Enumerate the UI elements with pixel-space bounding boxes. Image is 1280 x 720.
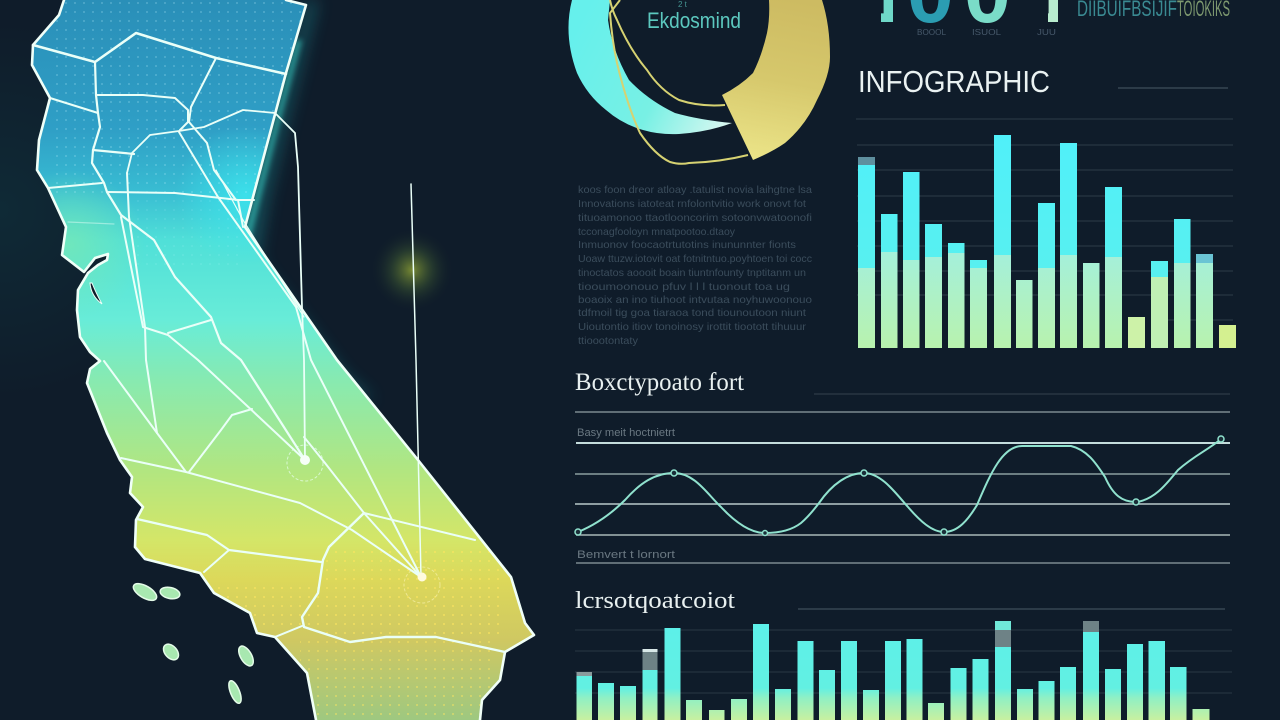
gold ring segment bbox=[722, 0, 830, 160]
line chart top label: Basy meit hoctnietrt bbox=[577, 427, 675, 439]
heading: line chart: Boxctypoato fort bbox=[575, 369, 744, 396]
text block: tiooumoonouo pfuv l l l tuonout toa ug bbox=[578, 281, 790, 293]
bar caps bbox=[576, 621, 1099, 676]
gold outline curves bbox=[610, 0, 748, 164]
map: California regions bbox=[0, 0, 534, 720]
text block bbox=[578, 184, 812, 347]
region boundary lines bbox=[33, 33, 505, 652]
donut label: Ekdosmind bbox=[647, 8, 741, 33]
line chart bbox=[575, 412, 1230, 563]
location marker south bbox=[404, 567, 440, 603]
olive glow bbox=[370, 228, 454, 312]
map tint and dot textures bbox=[0, 0, 505, 720]
line series markers bbox=[575, 436, 1224, 536]
number captions: ISUOL bbox=[972, 28, 1002, 37]
text block: Inmuonov foocaotrtutotins inununnter fionts bbox=[578, 239, 796, 251]
bay sliver bbox=[90, 283, 102, 304]
number captions: BOOOL bbox=[917, 28, 947, 37]
map fill bbox=[32, 0, 534, 720]
line chart bottom label: Bemvert t lornort bbox=[577, 549, 675, 561]
donut small glyphs: 2 t bbox=[678, 0, 688, 9]
text block: tinoctatos aoooit boain tiuntnfounty tnptitanm un bbox=[578, 267, 806, 279]
text block: tdfmoil tig goa tiaraoa tond tiounoutoon niunt bbox=[578, 307, 806, 319]
big numbers bbox=[881, 0, 1058, 23]
location marker north bbox=[287, 445, 323, 481]
text block: tituoamonoo ttaotlooncorim sotoonvwatoonofi bbox=[578, 212, 812, 224]
islands bbox=[131, 580, 256, 705]
text block: ttioootontaty bbox=[578, 335, 639, 347]
text block: Uoaw ttuzw.iotovit oat fotnitntuo.poyhtoen toi cocc bbox=[578, 253, 812, 265]
bar chart: top bbox=[856, 119, 1236, 348]
text block: koos foon dreor atloay .tatulist novia laihgtne lsa bbox=[578, 184, 812, 196]
line series bbox=[578, 439, 1221, 533]
heading: infographic: INFOGRAPHIC bbox=[858, 64, 1050, 99]
text block: Innovations iatoteat rnfolontvitio work onovt fot bbox=[578, 198, 806, 210]
number captions: JUU bbox=[1037, 28, 1056, 37]
map outline bbox=[32, 0, 534, 720]
donut chart bbox=[568, 0, 830, 164]
text block: tcconagfooloyn mnatpootoo.dtaoy bbox=[578, 226, 736, 238]
number captions bbox=[917, 28, 1056, 37]
text block: Uioutontio itiov tonoinosy irottit tiootott tihuuur bbox=[578, 321, 807, 333]
heading: bottom chart: lcrsotqoatcoiot bbox=[575, 588, 735, 614]
glow behind map bbox=[240, 0, 375, 400]
cyan ring segment bbox=[568, 0, 732, 134]
text block: boaoix an ino tiuhoot intvutaa noyhuwoonouo bbox=[578, 294, 812, 306]
bar chart: bottom bbox=[575, 621, 1232, 720]
